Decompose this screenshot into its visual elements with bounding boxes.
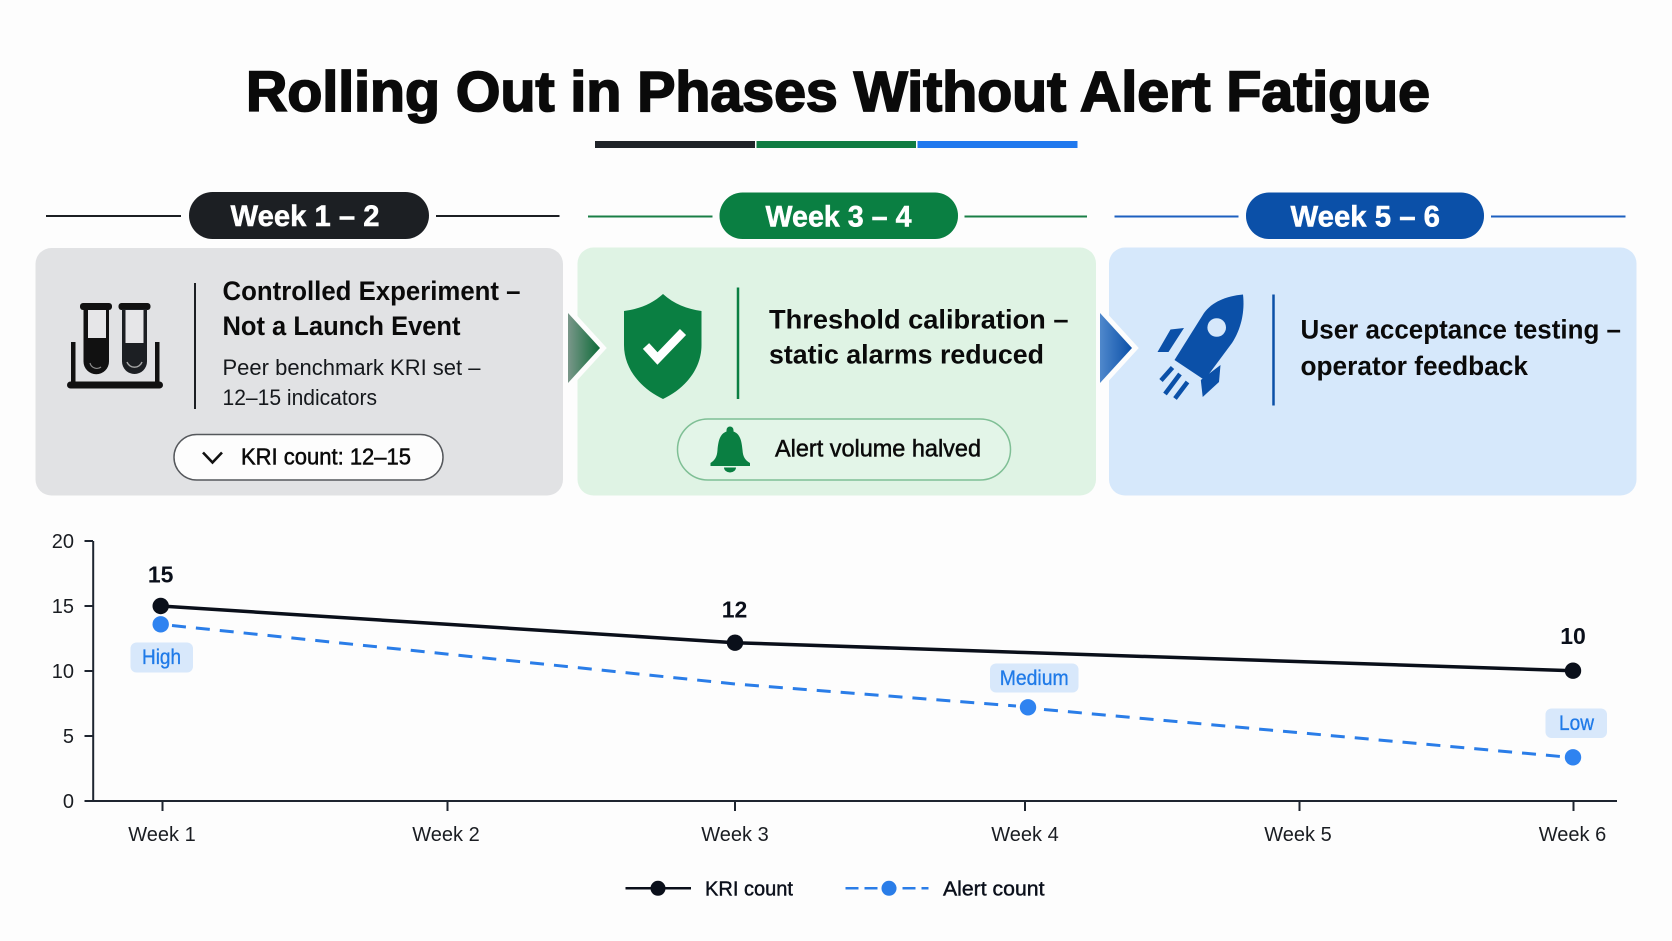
- y axis: 5: [63, 726, 74, 748]
- phase header: week 5-6: [1114, 192, 1626, 239]
- heading: user acceptance testing: User acceptance testing –: [1300, 314, 1621, 344]
- badge: low: [1546, 708, 1607, 738]
- series: alert count: [152, 616, 1581, 766]
- icon: bell: [710, 426, 750, 472]
- heading: controlled experiment: Controlled Experiment –: [222, 276, 520, 306]
- series: KRI count: 10: [1560, 623, 1586, 649]
- legend: [626, 879, 1045, 901]
- legend item: KRI count: [626, 879, 793, 901]
- x axis: Week 6: [1539, 824, 1606, 846]
- x axis: Week 2: [412, 824, 480, 846]
- x axis: Week 5: [1264, 824, 1332, 846]
- heading: threshold calibration: static alarms reduced: [769, 340, 1044, 370]
- legend item: KRI count: KRI count: [705, 879, 793, 901]
- legend item: alert count: Alert count: [943, 879, 1045, 901]
- heading: user acceptance testing: [1300, 314, 1621, 381]
- phase header: week 3-4: [588, 192, 1087, 239]
- heading: controlled experiment: [222, 276, 520, 341]
- phase header: week 1-2: [46, 192, 560, 239]
- y axis: 15: [52, 596, 74, 618]
- icon: shield with check: [624, 294, 702, 399]
- arrow: phase 2 to phase 3: [1096, 300, 1132, 396]
- panel: week 5-6 user acceptance testing: [1109, 248, 1636, 496]
- callout: alert volume halved: [678, 419, 1010, 480]
- title underline: three colour segments: [595, 141, 1078, 148]
- panel: week 3-4 threshold calibration: [578, 248, 1096, 496]
- icon: rocket: [1158, 294, 1244, 398]
- x axis: Week 4: [991, 824, 1059, 846]
- x axis: Week 3: [701, 824, 769, 846]
- divider: [1272, 294, 1275, 406]
- y axis: 20: [52, 531, 74, 553]
- y axis: 10: [52, 661, 74, 683]
- phase header: week 3-4: Week 3 – 4: [766, 200, 912, 234]
- text: peer benchmark: [222, 355, 481, 410]
- text: peer benchmark: 12–15 indicators: [222, 385, 377, 410]
- callout: KRI count: [174, 434, 443, 480]
- callout: KRI count: KRI count: 12–15: [241, 444, 411, 470]
- series: KRI count: [148, 562, 1586, 679]
- series: KRI count: 12: [722, 597, 747, 623]
- x axis: Week 1: [128, 824, 196, 846]
- divider: [194, 283, 196, 409]
- x axis: [85, 801, 1617, 846]
- heading: threshold calibration: Threshold calibration –: [769, 304, 1068, 334]
- phase header: week 1-2: Week 1 – 2: [230, 200, 380, 233]
- heading: threshold calibration: [769, 304, 1068, 370]
- callout: alert volume halved: Alert volume halved: [775, 436, 981, 463]
- badge: low: Low: [1559, 712, 1595, 735]
- badge: high: [130, 642, 193, 672]
- arrow: phase 1 to phase 2: [563, 300, 600, 396]
- badge: medium: Medium: [1000, 667, 1069, 690]
- heading: user acceptance testing: operator feedback: [1300, 351, 1529, 381]
- divider: [737, 288, 739, 399]
- heading: controlled experiment: Not a Launch Event: [222, 311, 461, 341]
- phase header: week 5-6: Week 5 – 6: [1290, 200, 1440, 234]
- text: peer benchmark: Peer benchmark KRI set –: [222, 355, 481, 380]
- y axis: 0: [63, 791, 74, 813]
- title: Rolling Out in Phases Without Alert Fatigue: [246, 60, 1430, 124]
- badge: medium: [990, 664, 1078, 692]
- icon: test tubes in rack: [67, 303, 163, 388]
- y axis: [52, 531, 93, 813]
- panel: week 1-2 controlled experiment: [36, 248, 563, 496]
- legend item: alert count: [846, 879, 1045, 901]
- series: KRI count: 15: [148, 562, 174, 588]
- line chart: KRI count and alert count: [52, 531, 1617, 846]
- badge: high: High: [142, 646, 181, 669]
